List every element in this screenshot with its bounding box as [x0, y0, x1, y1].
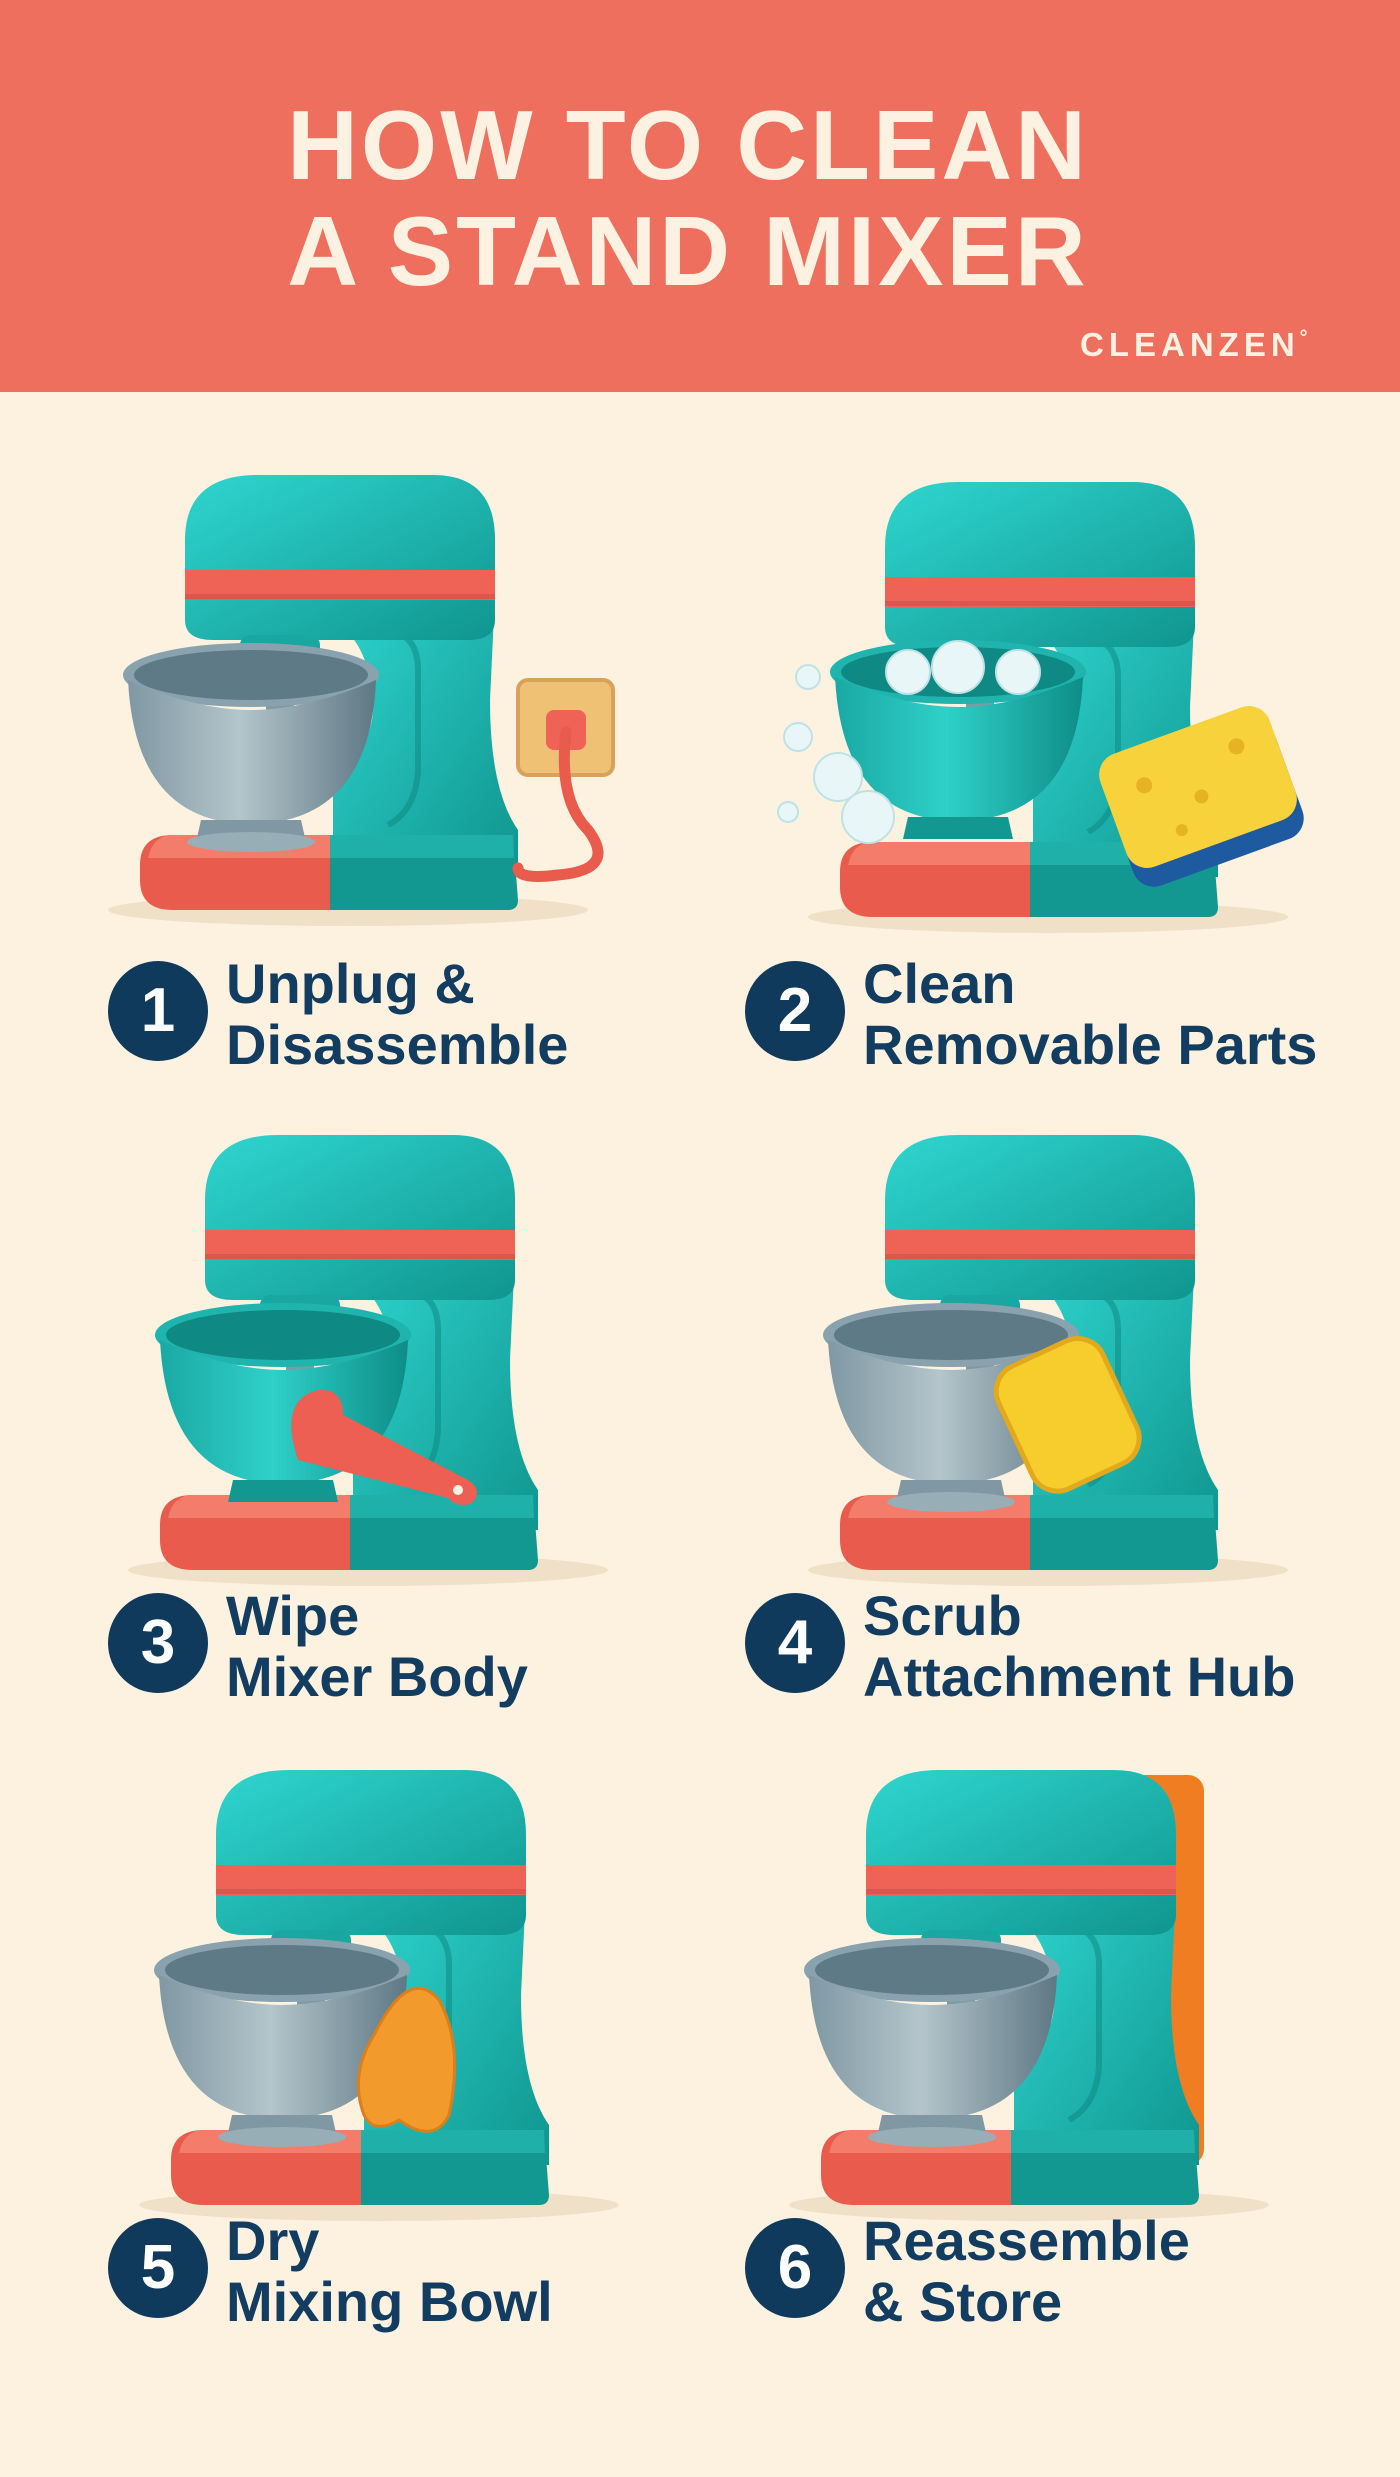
- step 6 label: Reassemble: [863, 2209, 1190, 2272]
- step 1 label: Unplug &: [226, 952, 475, 1015]
- step 5 label: Mixing Bowl: [226, 2270, 553, 2333]
- icon: spatula: [291, 1390, 477, 1505]
- step 3 label: Wipe: [226, 1584, 359, 1647]
- step 2 illustration: mixer with bubbles and sponge: [778, 482, 1310, 933]
- icon: orange cloth: [358, 1988, 455, 2131]
- icon: soap bubbles: [778, 641, 1040, 843]
- step 5 label: [108, 2209, 553, 2333]
- step 3 label: [108, 1584, 528, 1708]
- step 6 illustration: mixer with cutting board: [789, 1770, 1269, 2221]
- step 4 label: Attachment Hub: [863, 1645, 1295, 1708]
- step 3 illustration: mixer with spatula: [128, 1135, 608, 1586]
- step 1 illustration: mixer with outlet: [108, 475, 613, 926]
- step 1 label: 1: [141, 976, 175, 1045]
- step 2 label: Clean: [863, 952, 1016, 1015]
- icon: sponge: [1093, 700, 1310, 893]
- icon: yellow sponge: [987, 1329, 1148, 1500]
- title: A STAND MIXER: [287, 196, 1089, 306]
- step 4 label: Scrub: [863, 1584, 1022, 1647]
- step 2 label: 2: [778, 976, 812, 1045]
- step 5 label: 5: [141, 2233, 175, 2302]
- brand logo: CLEANZEN°: [1080, 326, 1308, 363]
- step 5 label: Dry: [226, 2209, 319, 2272]
- step 4 label: [745, 1584, 1295, 1708]
- step 4 illustration: mixer with sponge on hub: [808, 1135, 1288, 1586]
- step 1 label: Disassemble: [226, 1013, 568, 1076]
- step 6 label: [745, 2209, 1190, 2333]
- step 2 label: Removable Parts: [863, 1013, 1317, 1076]
- step 3 label: 3: [141, 1608, 175, 1677]
- step 3 label: Mixer Body: [226, 1645, 528, 1708]
- step 2 label: [745, 952, 1317, 1076]
- step 6 label: 6: [778, 2233, 812, 2302]
- step 5 illustration: mixer with drying cloth: [139, 1770, 619, 2221]
- step 4 label: 4: [778, 1608, 812, 1677]
- title: [287, 90, 1089, 306]
- icon: wall outlet with cord: [518, 680, 613, 876]
- step 6 label: & Store: [863, 2270, 1062, 2333]
- title: HOW TO CLEAN: [287, 90, 1089, 200]
- header banner: [0, 0, 1400, 392]
- icon: orange board: [1129, 1775, 1204, 2165]
- step 1 label: [108, 952, 568, 1076]
